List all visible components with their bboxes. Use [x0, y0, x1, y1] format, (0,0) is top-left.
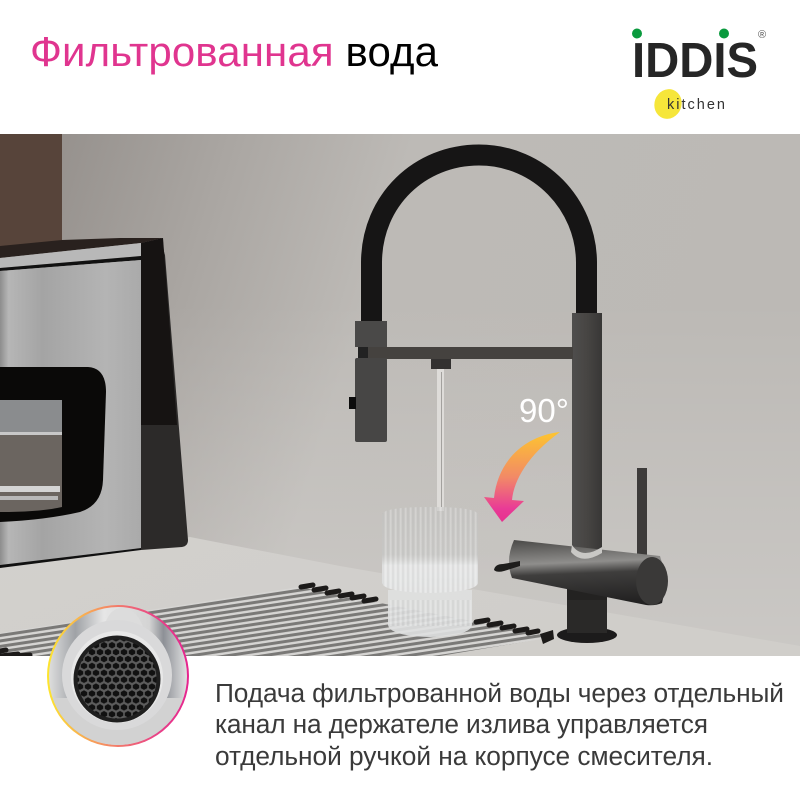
lens ring	[47, 605, 189, 747]
filter nozzle	[431, 359, 451, 369]
line 3: отдельной ручкой на корпусе смесителя.	[215, 741, 713, 771]
aerator rim	[62, 620, 172, 730]
title: Фильтрованная вода	[30, 28, 439, 75]
wood panel	[0, 134, 62, 250]
glass lower part	[388, 590, 472, 637]
spray button	[349, 397, 356, 409]
machine dark side	[141, 238, 188, 550]
line 2: канал на держателе излива управляется	[215, 709, 708, 739]
machine lid	[0, 238, 163, 258]
lever handle	[637, 468, 647, 558]
silver band	[0, 243, 141, 268]
faucet column	[572, 313, 602, 553]
line 1: Подача фильтрованной воды через отдельный	[215, 678, 784, 708]
silver body	[0, 260, 141, 565]
carafe	[0, 435, 62, 512]
water stream	[437, 369, 444, 511]
registered mark: ®	[758, 29, 766, 41]
counter	[0, 537, 566, 633]
label: 90 degrees: 90°	[519, 392, 569, 429]
drying mat	[0, 585, 554, 656]
base stem	[567, 589, 607, 600]
mat bars	[0, 587, 553, 656]
faucet hose	[372, 155, 586, 322]
faucet	[349, 155, 668, 643]
logo: IDDIS kitchen	[632, 28, 766, 123]
glass	[382, 507, 478, 637]
logo wordmark: IDDIS	[632, 34, 758, 88]
aerator mesh	[78, 640, 156, 718]
aerator mesh housing	[74, 636, 160, 722]
icon: yellow spot	[650, 85, 686, 123]
base disc	[557, 629, 617, 643]
mat end cap large	[540, 630, 554, 644]
faucet body	[509, 540, 665, 605]
panel: kitchen photo	[0, 134, 800, 656]
faucet arm	[365, 347, 573, 359]
arrow: 90 degree rotation	[484, 432, 560, 522]
lens content	[47, 605, 189, 748]
description text	[215, 678, 784, 771]
spray head	[355, 321, 387, 347]
icon: green dots	[632, 28, 729, 38]
column collar	[571, 545, 602, 559]
small spout handle	[494, 561, 520, 572]
body end cap	[636, 557, 668, 605]
glass upper part	[382, 548, 478, 590]
lower chrome	[52, 698, 184, 745]
spout neck	[106, 618, 108, 620]
wall	[0, 134, 800, 656]
callout: aerator close-up	[47, 605, 189, 748]
logo subtitle: kitchen	[667, 97, 725, 113]
coffee machine	[0, 238, 188, 568]
machine window	[0, 367, 106, 522]
glass ribs	[382, 507, 478, 593]
mat end caps	[0, 585, 538, 656]
